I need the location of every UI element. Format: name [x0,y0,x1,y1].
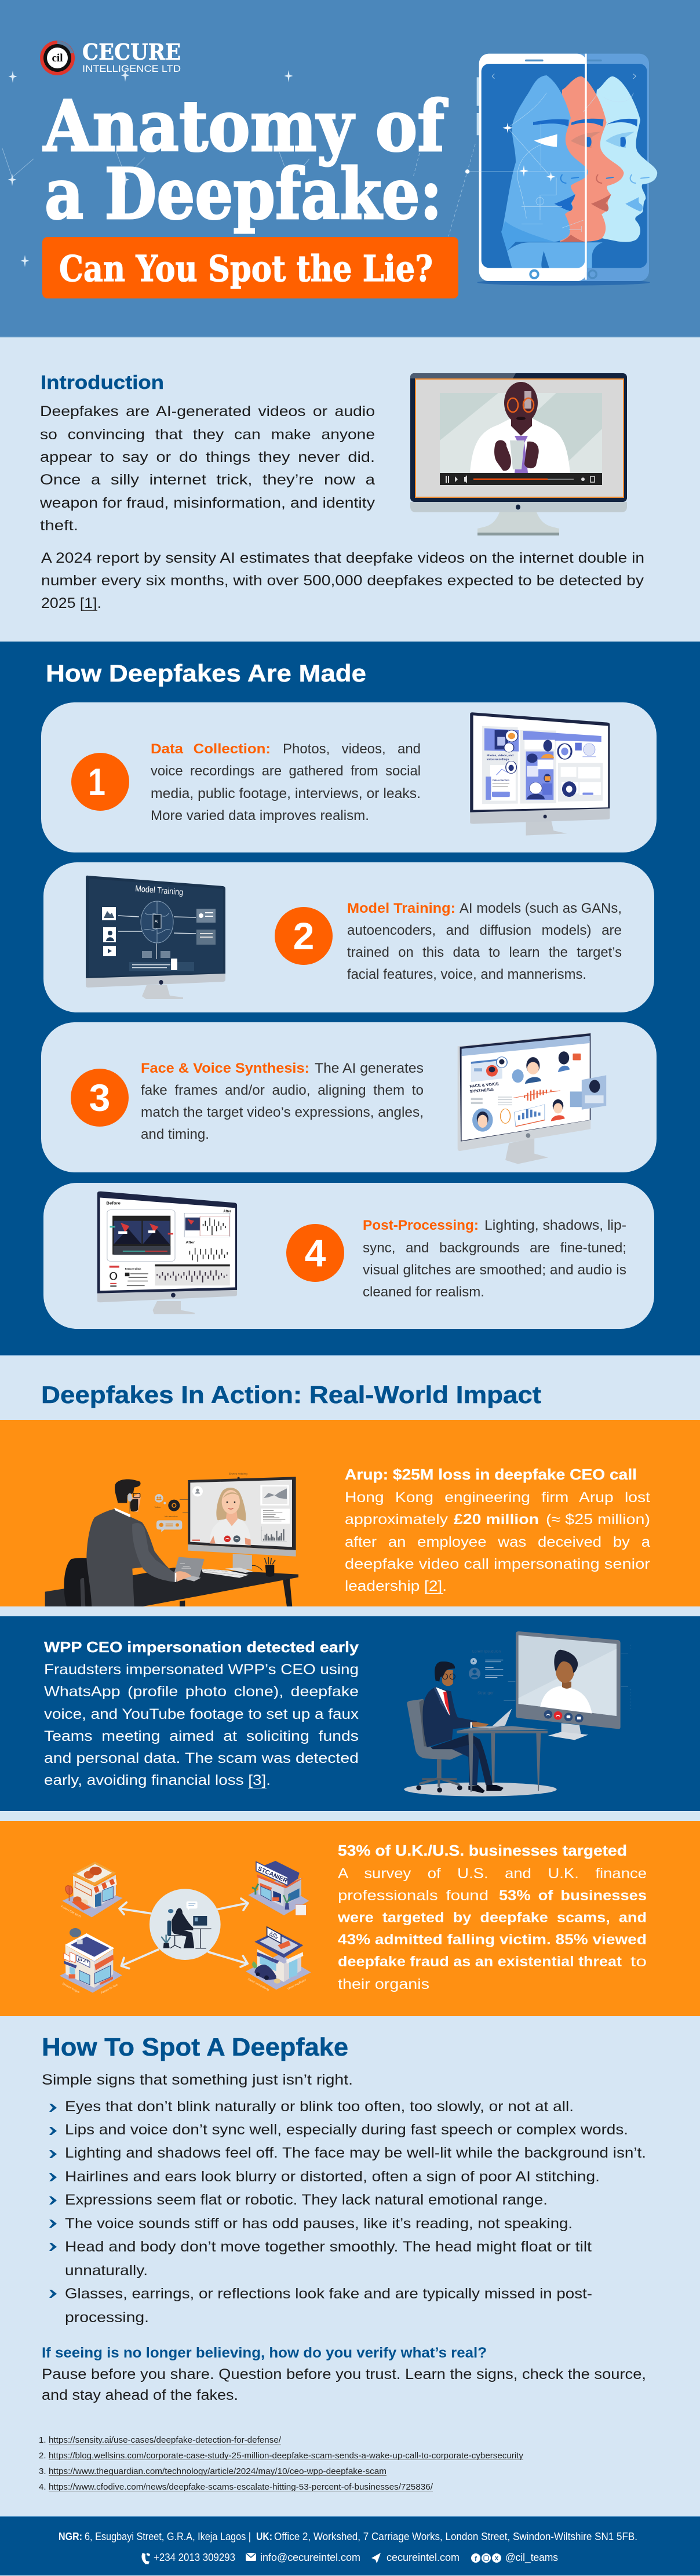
illustration: employee on deepfake video call: Enwou netsting [229,1473,247,1475]
text: arup case: Arup: $25M loss in deepfake CEO call [345,1466,637,1483]
text: face and voice synthesis: fake frames and/or audio, aligning them to [141,1083,424,1098]
text: data collection: More varied data improves realism. [151,808,369,824]
icon: number 4 [286,1224,344,1282]
callout: verify what's real: Pause before you share. Question before you trust. Learn the signs, check the source, [42,2366,646,2382]
icon: number 4: 4 [305,1231,326,1274]
logo wordmark: INTELLIGENCE LTD [82,63,181,74]
icon: phone [141,2553,150,2564]
text: 53 percent of businesses: 53% of U.K./U.S. businesses targeted [338,1842,627,1859]
text: addresses: UK: [256,2531,272,2542]
icon: monitor face and voice synthesis: FACE & VOICE [469,1082,500,1089]
text: intro paragraph: Once a silly internet trick, they’re now a [40,472,375,488]
text: 53 percent of businesses: deepfake fraud as an existential threat [338,1954,622,1970]
logo wordmark: CECURE [82,39,181,65]
icon: monitor model training [86,876,225,999]
contact row: info@cecureintel.com [260,2552,360,2563]
list: references: https://www.theguardian.com/technology/article/2024/may/10/ceo-wpp-deepfake-scam [49,2466,387,2476]
text: 53 percent of businesses: were targeted by deepfake scams, and [337,1910,647,1926]
icon: send [371,2553,381,2563]
panel: wpp case [0,1616,700,1811]
text: wpp case: Fraudsters impersonated WPP’s CEO using [44,1662,359,1678]
text: wpp case: early, avoiding financial loss [3]. [44,1772,271,1788]
card: step 4 [43,1183,654,1329]
icon: monitor face and voice synthesis: SYNTHESIS [469,1087,494,1094]
text: face and voice synthesis [141,1061,424,1142]
text: spot intro: Simple signs that something just isn’t right. [42,2072,353,2088]
illustration: executive on video call [404,1631,630,1797]
text: intro paragraph [39,403,375,534]
text: sensity statistic [41,550,644,611]
text: model training: autoencoders, and diffusion models) are [347,923,622,938]
icon: number 3: 3 [89,1076,110,1119]
text: wpp case: and personal data. The scam was detected [44,1750,359,1766]
list: warning signs: Expressions seem flat or robotic. They lack natural emotional range. [65,2192,548,2208]
text: intro paragraph: appear to say or do things they never did. [40,449,375,465]
title [43,85,448,235]
panel: 53 percent of businesses [0,1821,700,2016]
card: step 2 [43,862,654,1012]
icon: bakery shop: Pakery Bak sport [60,1905,82,1919]
text: intro paragraph: so convincing that they can make anyone [40,427,375,443]
panel: how to spot a deepfake [39,2033,646,2492]
text: 53 percent of businesses [337,1842,647,1992]
icon: monitor before and after post-processing: Before [106,1201,121,1206]
text: post-processing: cleaned for realism. [363,1284,484,1300]
text: addresses: Office 2, Workshed, 7 Carriage Works, London Street, Swindon-Wiltshire SN1 5FB. [274,2531,637,2542]
text: face and voice synthesis: match the target video’s expressions, angles, [141,1105,424,1120]
subtitle banner [42,237,458,298]
icon: number 1: 1 [88,760,105,803]
text: 53 percent of businesses: 43% admitted falling victim. 85% viewed [338,1932,647,1948]
heading: how to spot a deepfake: How To Spot A Deepfake [42,2033,348,2061]
text: data collection: voice recordings are gathered from social [151,763,421,779]
text: 53 percent of businesses: 53% of businesses [499,1888,647,1904]
text: arup case: leadership [2]. [345,1578,447,1594]
text: data collection: media, public footage, interviews, or leaks. [151,786,421,801]
text: 53 percent of businesses: professionals found [338,1888,488,1904]
card: step 3 [41,1022,657,1172]
list: warning signs: Hairlines and ears look blurry or distorted, often a sign of poor AI stitching. [65,2169,600,2185]
illustration: employee on deepfake video call: Info sevution [165,1515,178,1518]
list: warning signs: Lighting and shadows feel off. The face may be well-lit while the background isn’t. [65,2145,646,2161]
panel: how deepfakes are made [0,642,700,1356]
icon: monitor face and voice synthesis [458,1033,606,1164]
text: intro paragraph: weapon for fraud, misinformation, and identity [39,495,375,511]
logo wordmark [82,39,181,74]
illustration: executive on video call: Lorem ipsuduion [472,1650,501,1654]
icon: monitor before and after post-processing [97,1192,237,1314]
panel: introduction [39,371,644,611]
icon: bakery shop [60,1861,123,1919]
text: intro paragraph: theft. [40,518,78,534]
list: references: 4. [39,2482,46,2492]
list: references: https://www.cfodive.com/news/deepfake-scams-escalate-hitting-53-percent-of-businesses/725836/ [49,2482,433,2492]
text: wpp case [44,1638,359,1788]
list: warning signs: The voice sounds stiff or has odd pauses, like it’s reading, not speaking. [65,2216,573,2232]
list: warning signs [65,2098,646,2326]
text: data collection: Photos, videos, and [283,741,421,757]
panel: hero header [0,0,700,338]
text: arup case: £20 million [454,1511,539,1528]
text: post-processing [363,1218,626,1300]
icon: monitor data collection dashboard: Photos, videos, and [487,753,513,757]
text: addresses: 6, Esugbayi Street, G.R.A, Ikeja Lagos | [85,2531,251,2542]
text: model training: AI models (such as GANs, [460,901,622,916]
text: face and voice synthesis: The AI generates [315,1061,424,1076]
icon: number 1 [71,753,129,811]
list: references [39,2435,523,2492]
icon: monitor data collection dashboard [470,712,610,836]
text: sensity statistic: A 2024 report by sensity AI estimates that deepfake videos on the internet double in [41,550,644,566]
list: warning signs: unnaturally. [65,2262,148,2279]
icon: monitor before and after post-processing: Remove Glitch [125,1267,141,1270]
icon: monitor model training: Model Training [135,884,184,897]
text: arup case: Hong Kong engineering firm Arup lost [345,1489,650,1506]
text: intro paragraph: Deepfakes are AI-generated videos or audio [40,403,375,420]
arrows from scammer to shops [119,1899,248,1969]
contact row: cecureintel.com [387,2552,460,2563]
icon: shop lower right [246,1927,311,1992]
text: model training: trained on this data to learn the target’s [347,945,622,960]
icon: storefront upper right [248,1861,309,1915]
illustration: employee on deepfake video call: Voline [155,1506,161,1509]
text: model training: facial features, voice, and mannerisms. [347,967,586,982]
text: post-processing: sync, and backgrounds are fine-tuned; [363,1240,626,1256]
illustration: scammer targeting shops [60,1861,311,1995]
icon: number 2: 2 [293,914,314,957]
text: post-processing: Lighting, shadows, lip- [484,1218,626,1233]
icon: shop lower left: Pactes for hue [100,1983,119,1995]
list: references: https://sensity.ai/use-cases/deepfake-detection-for-defense/ [49,2435,282,2445]
text: model training: Model Training: [347,901,455,916]
icon: shop lower right: Tmne mspfhater [287,1978,307,1991]
text: data collection [151,741,421,824]
icon: number 2 [275,907,333,965]
list: warning signs: Head and body don’t move together smoothly. The head might float or tilt [65,2239,592,2255]
heading: introduction: Introduction [41,371,164,393]
list: warning signs: Eyes that don’t blink naturally or blink too often, too slowly, or not at all. [65,2098,574,2115]
text: addresses [59,2531,637,2542]
list: references: 2. [39,2451,46,2461]
contact row: @cil_teams [505,2552,558,2564]
icon: number 3 [71,1069,129,1127]
text: 53 percent of businesses: to [630,1954,647,1970]
icon: monitor before and after post-processing: After [223,1209,231,1213]
heading: how deepfakes are made: How Deepfakes Are Made [46,660,366,687]
text: sensity statistic: 2025 [1]. [41,595,101,611]
title: a Deepfake: [45,152,442,235]
icon: monitor data collection dashboard: voice recordings [487,757,509,760]
list: references: https://blog.wellsins.com/corporate-case-study-25-million-deepfake-scam-sends-a-wake-up-call-to-corporate-cybersecurity [49,2451,523,2461]
text: post-processing: Post-Processing: [363,1218,479,1233]
list: references: 3. [39,2466,46,2476]
panel: footer [0,2516,700,2575]
icon: monitor with deepfake presenter [410,373,627,535]
icon: phone with three faces [465,54,657,286]
card: step 1 [41,702,657,852]
icon: shop lower left [60,1928,122,1995]
list: references: 1. [39,2435,46,2445]
list: warning signs: Glasses, earrings, or reflections look fake and are typically missed in post- [65,2286,592,2302]
logo [40,41,75,75]
text: 53 percent of businesses: their organis [338,1976,429,1992]
text: model training [347,901,622,982]
icon: monitor before and after post-processing: After [185,1241,195,1244]
list: warning signs: processing. [65,2309,149,2326]
callout: verify what's real: If seeing is no longer believing, how do you verify what’s real? [42,2345,487,2361]
icon: shop lower right: 0 2% [270,1931,278,1937]
text: wpp case: Teams meeting aimed at soliciting funds [44,1728,359,1744]
text: data collection: Data Collection: [151,741,271,757]
title: Anatomy of [43,85,448,167]
text: addresses: NGR: [59,2531,82,2542]
icon: shop lower left: EI ZY [78,1956,90,1965]
text: 53 percent of businesses: A survey of U.S. and U.K. finance [338,1865,647,1882]
subtitle banner: Can You Spot the Lie? [59,247,433,290]
text: arup case: deepfake video call impersonating senior [345,1556,650,1572]
logo: cil [52,52,63,64]
icon: list chevrons [49,2104,57,2298]
text: arup case: after an employee was deceived by a [345,1534,650,1550]
illustration: employee on deepfake video call [45,1473,298,1606]
icon: social media: X [495,2556,499,2562]
icon: hooded scammer at computer [161,1901,212,1948]
contact row [141,2552,558,2564]
icon: storefront upper right: STCANIER [257,1865,289,1885]
icon: monitor model training: AI [155,920,159,924]
text: face and voice synthesis: and timing. [141,1127,209,1142]
icon: shop lower right: Sanor somaiaiwng [247,1977,270,1992]
text: arup case: approximately [345,1511,449,1528]
text: post-processing: visual glitches are smoothed; and audio is [363,1262,626,1278]
text: wpp case: voice, and YouTube footage to set up a faux [44,1706,359,1722]
icon: mail [246,2553,256,2561]
callout: verify what's real [42,2345,646,2403]
callout: verify what's real: and stay ahead of the fakes. [42,2387,238,2403]
heading: deepfakes in action: Deepfakes In Action: Real-World Impact [41,1381,541,1408]
text: face and voice synthesis: Face & Voice Synthesis: [141,1061,309,1076]
panel: arup case [0,1420,700,1606]
text: wpp case: WhatsApp (profile photo clone), deepfake [44,1684,359,1700]
illustration: executive on video call: Stranger [477,1690,494,1696]
text: arup case [345,1466,650,1594]
text: arup case: (≈ $25 million) [546,1511,650,1528]
list: warning signs: Lips and voice don’t sync well, especially during fast speech or complex words. [65,2122,628,2138]
contact row: +234 2013 309293 [154,2552,235,2563]
icon: social media: f [475,2556,477,2563]
text: sensity statistic: number every six months, with over 500,000 deepfakes expected to be detected by [41,573,644,589]
icon: shop lower left: Emrcon Engee [61,1982,81,1994]
icon: shop lower right: DOAR [268,1933,278,1940]
icon: monitor data collection dashboard: Data collection [493,779,509,781]
text: wpp case: WPP CEO impersonation detected early [44,1638,359,1656]
icon: social media [471,2553,501,2563]
